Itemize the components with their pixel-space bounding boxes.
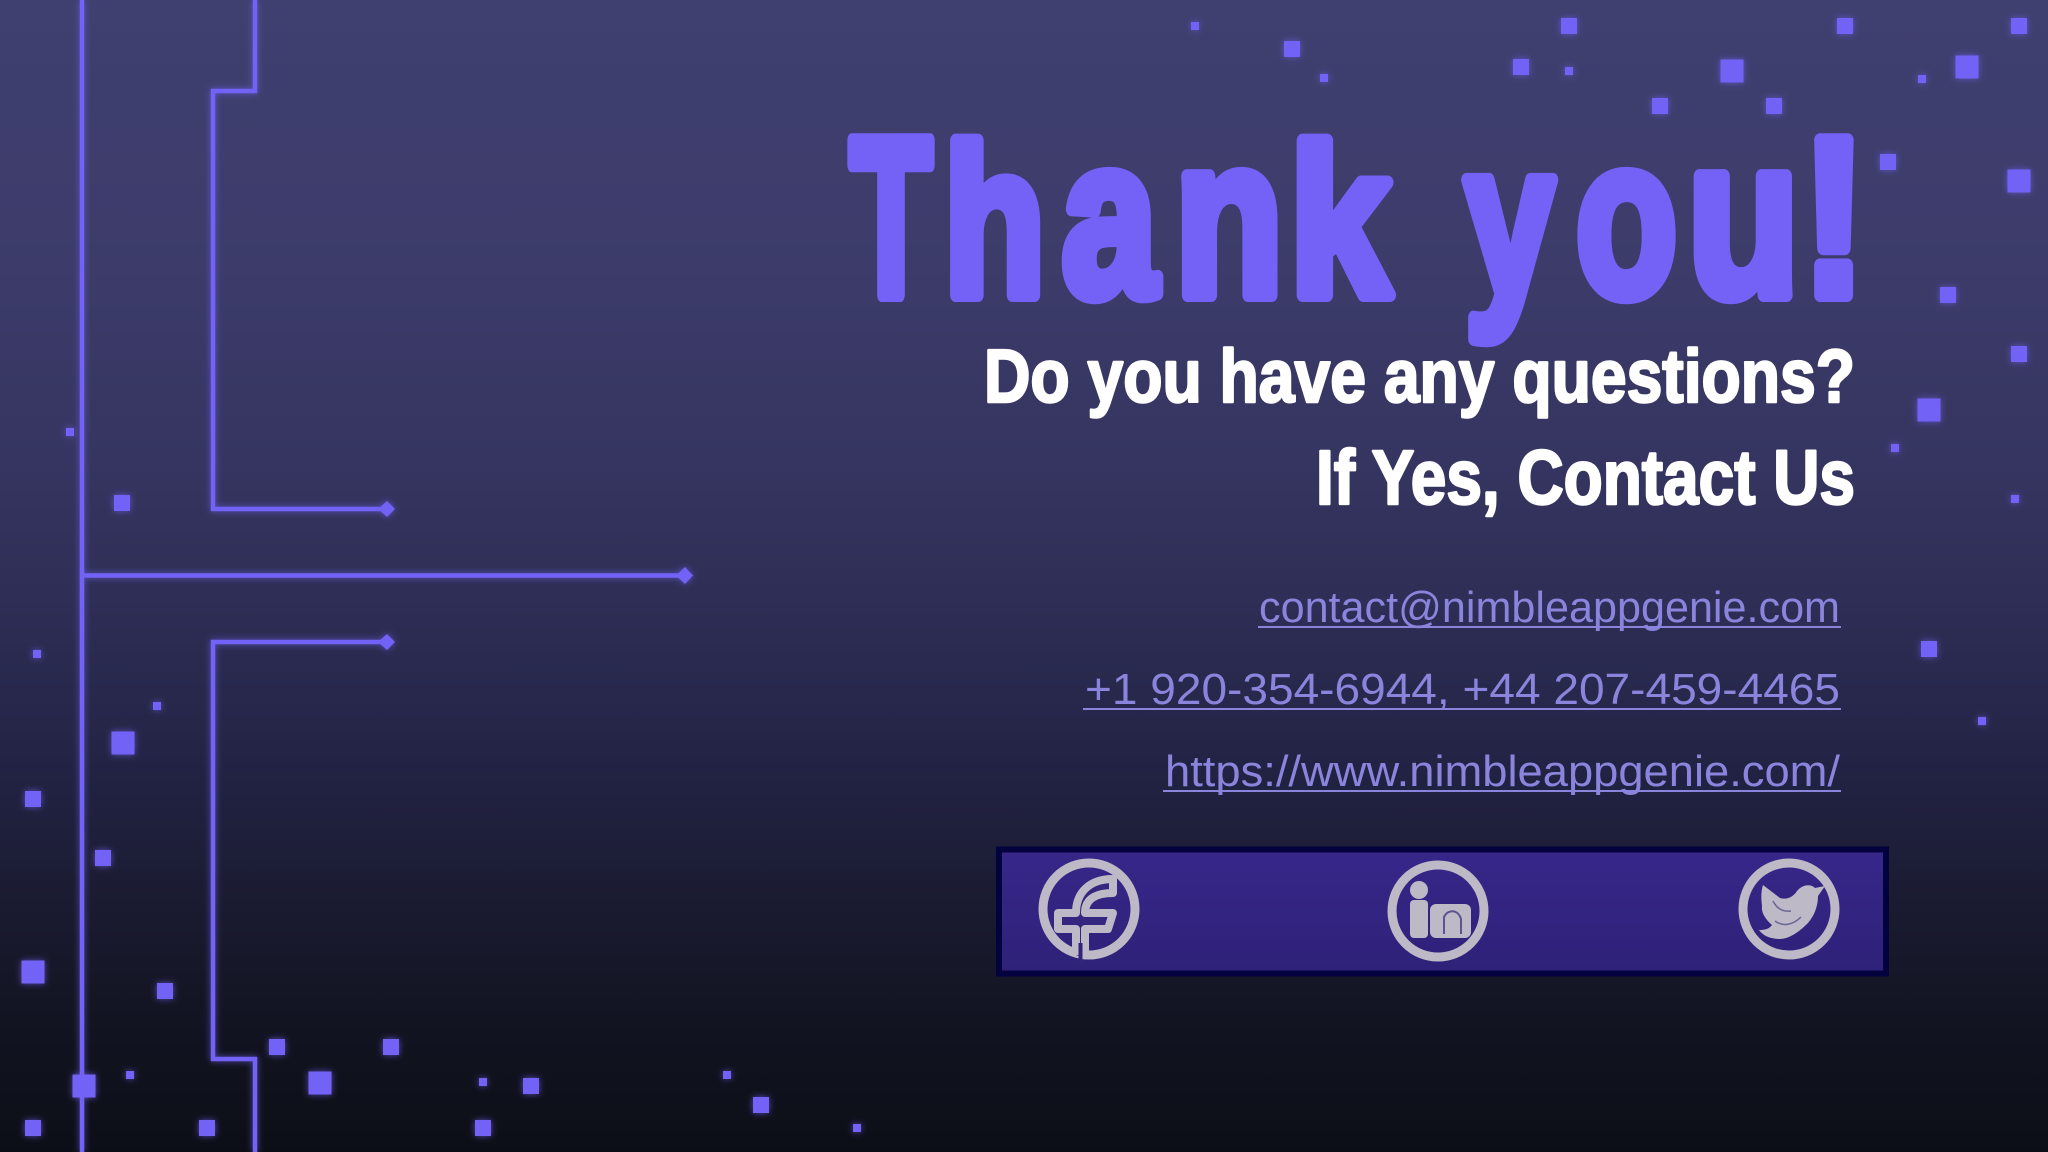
title: h [944, 103, 1045, 341]
title: a [1062, 91, 1158, 343]
title: T [850, 91, 932, 343]
right particle squares [1191, 18, 2030, 725]
title: ! [1802, 91, 1866, 343]
icon: twitter [1743, 863, 1835, 955]
title: u [1688, 91, 1799, 343]
left particle squares [22, 428, 861, 1136]
website url: https://www.nimbleappgenie.com/ [1165, 747, 1841, 796]
title: o [1576, 91, 1677, 343]
contact heading: If Yes, Contact Us [1316, 435, 1855, 521]
title: n [1175, 91, 1283, 343]
title: k [1290, 103, 1390, 341]
main vertical circuit line [80, 0, 84, 1152]
question heading: Do you have any questions? [984, 334, 1855, 418]
social media bar [999, 850, 1886, 974]
phone numbers: +1 920-354-6944, +44 207-459-4465 [1085, 665, 1840, 714]
circuit lines [82, 0, 693, 1152]
icon: linkedin [1392, 865, 1484, 957]
middle circuit branch [82, 567, 693, 584]
title: y [1465, 99, 1554, 342]
lower circuit branch [213, 634, 395, 1152]
contact links [1083, 583, 1841, 796]
icon: facebook [1043, 863, 1135, 963]
email address: contact@nimbleappgenie.com [1259, 583, 1840, 632]
upper circuit branch [213, 0, 395, 517]
